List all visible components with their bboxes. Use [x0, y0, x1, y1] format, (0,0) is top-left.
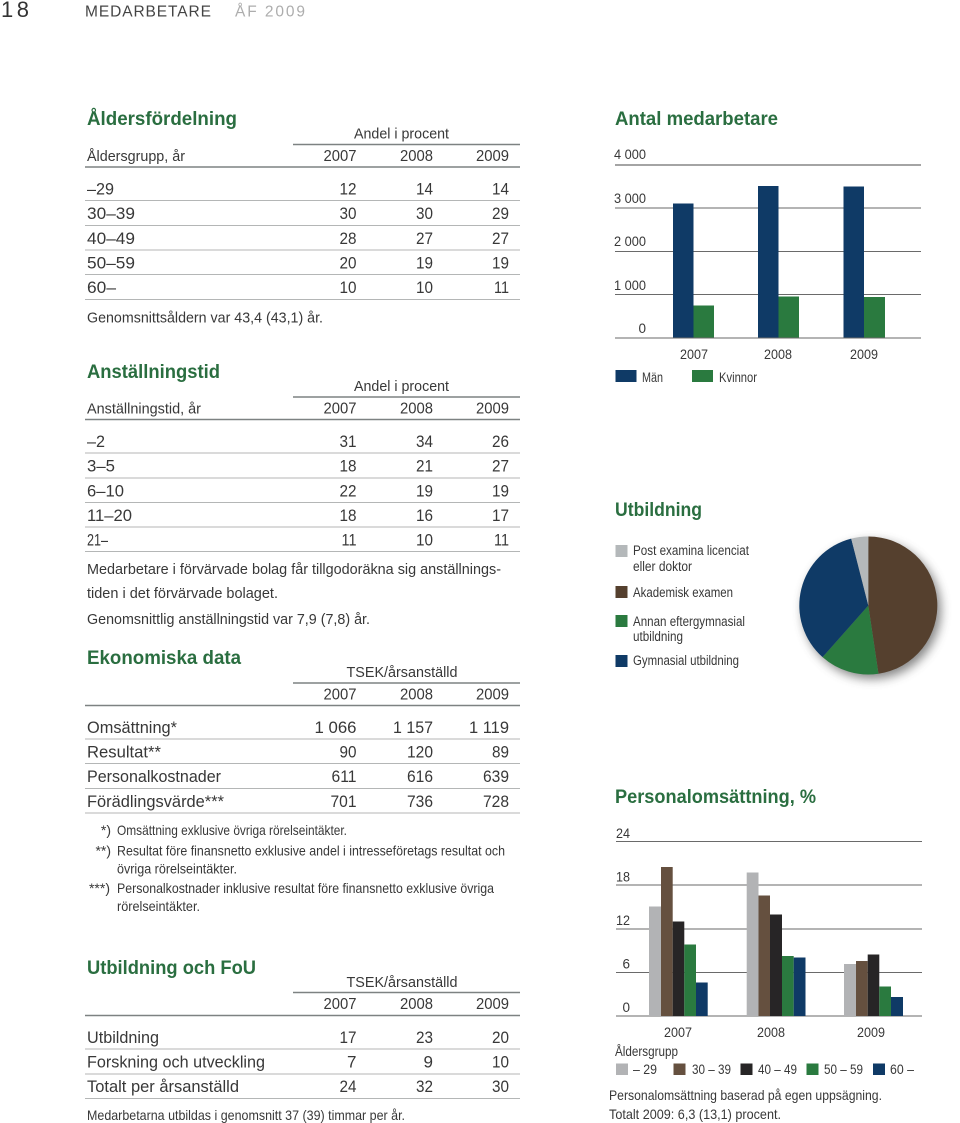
column header: 2007	[324, 686, 356, 704]
column header	[85, 378, 520, 420]
table rows: 120	[407, 742, 433, 762]
year labels: 2009	[850, 347, 878, 362]
table rows: 27	[492, 456, 509, 476]
notes: Genomsnittlig anställningstid var 7,9 (7,8) år.	[87, 611, 370, 628]
column header: 2007	[324, 996, 356, 1013]
table rows: 27	[416, 229, 433, 248]
table rows	[85, 1028, 520, 1098]
column header: 2008	[400, 996, 433, 1013]
table rows: 20	[340, 254, 356, 272]
heading: Utbildning och FoU	[87, 957, 256, 979]
table rows: –2	[87, 432, 105, 451]
table rows: –29	[87, 180, 114, 198]
table rows	[85, 718, 520, 813]
table rows: 1 119	[469, 718, 509, 737]
footnotes	[89, 822, 505, 914]
notes: Medarbetare i förvärvade bolag får tillgodoräkna sig anställnings-	[87, 561, 501, 578]
column header: 2009	[476, 148, 509, 165]
table rows: 21–	[87, 530, 108, 550]
legend: utbildning	[633, 629, 683, 644]
table rows: Personalkostnader	[87, 767, 221, 786]
table rows: 19	[416, 482, 433, 500]
table rows: 1 157	[393, 718, 433, 737]
heading: Åldersfördelning	[87, 106, 237, 130]
legend	[615, 1044, 914, 1077]
table rows: 19	[492, 482, 509, 500]
legend: – 29	[633, 1062, 657, 1077]
column header: Åldersgrupp, år	[87, 148, 185, 165]
table rows: 3–5	[87, 456, 115, 476]
table rows: 611	[332, 767, 356, 786]
grid and axis labels: 2 000	[614, 234, 646, 249]
legend	[616, 543, 749, 668]
column header: 2008	[400, 686, 433, 704]
table rows: 17	[492, 506, 509, 525]
column header: Andel i procent	[354, 378, 450, 395]
table rows: Förädlingsvärde***	[87, 792, 224, 811]
table rows: 29	[492, 204, 509, 223]
column header: 2009	[476, 996, 509, 1013]
legend: Akademisk examen	[633, 585, 733, 600]
legend: Män	[642, 370, 663, 385]
table rows: 89	[492, 742, 509, 762]
column header: 2007	[324, 148, 356, 165]
grid and axis labels: 1 000	[614, 278, 646, 293]
table rows: 28	[340, 229, 356, 248]
column header: TSEK/årsanställd	[346, 664, 458, 681]
chart: Personalomsättning	[609, 786, 922, 1122]
table rows: 31	[340, 432, 356, 451]
table rows: 11	[494, 278, 509, 297]
year labels: 2007	[680, 347, 708, 362]
table rows: 639	[483, 767, 509, 786]
table: Åldersfördelning	[85, 106, 520, 326]
footnotes: **)	[95, 842, 111, 858]
grid and axis labels	[614, 147, 921, 338]
column header: 2008	[400, 400, 433, 418]
table rows: 12	[340, 180, 356, 198]
table rows: 616	[407, 767, 433, 786]
table rows: 10	[340, 278, 356, 297]
table rows: 19	[492, 254, 509, 272]
legend: 40 – 49	[758, 1062, 797, 1077]
heading: Antal medarbetare	[615, 108, 778, 130]
table rows: 21	[416, 456, 433, 476]
legend: Post examina licenciat	[633, 543, 749, 558]
table rows	[85, 180, 520, 300]
legend: eller doktor	[633, 559, 692, 574]
footnotes: övriga rörelseintäkter.	[117, 860, 237, 876]
year labels	[664, 1025, 885, 1040]
column header: 2009	[476, 400, 509, 418]
table: Ekonomiska data	[85, 647, 520, 914]
legend: 60 –	[890, 1062, 914, 1077]
column header: 2007	[324, 400, 356, 418]
grid and axis labels: 0	[622, 1000, 630, 1015]
notes	[87, 561, 501, 628]
footnotes: Resultat före finansnetto exklusive andel i intresseföretags resultat och	[117, 842, 505, 858]
legend: Kvinnor	[719, 370, 757, 385]
table rows	[85, 432, 520, 552]
legend: Gymnasial utbildning	[633, 653, 739, 668]
year labels: 2008	[757, 1025, 785, 1040]
table rows: 24	[340, 1077, 356, 1096]
grid and axis labels: 0	[638, 321, 646, 336]
heading: Utbildning	[615, 499, 702, 521]
table rows: 6–10	[87, 482, 124, 500]
table rows: Resultat**	[87, 742, 161, 762]
table rows: 30–39	[87, 204, 135, 223]
table rows: Utbildning	[87, 1028, 159, 1047]
table: Anställningstid	[85, 361, 520, 628]
table rows: 27	[492, 229, 509, 248]
table rows: Omsättning*	[87, 718, 177, 737]
table rows: 40–49	[87, 229, 135, 248]
heading: Ekonomiska data	[87, 647, 241, 669]
table rows: 10	[416, 530, 433, 550]
table rows: Totalt per årsanställd	[87, 1077, 239, 1096]
footnotes: Personalkostnader inklusive resultat före finansnetto exklusive övriga	[117, 880, 494, 896]
table rows: 9	[424, 1052, 433, 1072]
footnotes: *)	[101, 822, 111, 838]
bars 2007	[649, 867, 708, 1016]
heading: Anställningstid	[87, 361, 220, 383]
legend: Åldersgrupp	[615, 1044, 678, 1059]
column header: Andel i procent	[354, 126, 450, 142]
grid and axis labels	[616, 826, 922, 1016]
table rows: 34	[416, 432, 433, 451]
year labels	[680, 347, 878, 362]
table rows: 10	[492, 1052, 509, 1072]
note: Totalt 2009: 6,3 (13,1) procent.	[609, 1106, 781, 1122]
table rows: 16	[416, 506, 433, 525]
year labels: 2009	[857, 1025, 885, 1040]
grid and axis labels: 6	[622, 956, 630, 972]
footnotes: ***)	[89, 880, 110, 896]
table rows: 14	[416, 180, 433, 198]
column header	[85, 126, 520, 167]
page header	[1, 0, 305, 22]
table rows: 7	[347, 1052, 356, 1072]
table rows: 1 066	[314, 718, 356, 737]
grid and axis labels: 4 000	[614, 147, 646, 162]
table rows: 11–20	[87, 506, 132, 525]
heading: Personalomsättning, %	[615, 786, 816, 808]
table rows: 90	[340, 742, 356, 762]
column header	[85, 664, 520, 706]
footnotes: rörelseintäkter.	[117, 898, 200, 914]
table: Utbildning och FoU	[85, 957, 520, 1123]
section name: MEDARBETARE	[85, 4, 211, 20]
column header	[85, 974, 520, 1016]
note	[609, 1087, 882, 1122]
chart: Utbildning	[615, 499, 941, 679]
table rows: 19	[416, 254, 433, 272]
table rows: 60–	[87, 278, 117, 297]
table rows: 11	[342, 530, 356, 550]
table rows: 30	[340, 204, 356, 223]
note: Genomsnittsåldern var 43,4 (43,1) år.	[87, 310, 323, 326]
table rows: 50–59	[87, 254, 135, 272]
bars 2009	[844, 954, 903, 1016]
chart: Antal medarbetare	[614, 108, 921, 385]
legend: 50 – 59	[824, 1062, 863, 1077]
table rows: 10	[416, 278, 433, 297]
bars	[673, 186, 885, 338]
grid and axis labels: 12	[616, 913, 630, 928]
table rows: 11	[494, 530, 509, 550]
bars 2008	[747, 872, 806, 1016]
table rows: 22	[340, 482, 356, 500]
table rows: 18	[340, 506, 356, 525]
column header: Anställningstid, år	[87, 400, 201, 418]
report name: ÅF 2009	[235, 4, 305, 20]
year labels: 2007	[664, 1025, 692, 1040]
grid and axis labels: 24	[616, 826, 630, 841]
table rows: 20	[492, 1028, 509, 1047]
table rows: 32	[416, 1077, 433, 1096]
table rows: 701	[330, 792, 356, 811]
column header: TSEK/årsanställd	[346, 974, 458, 991]
legend: 30 – 39	[692, 1062, 731, 1077]
table rows: 17	[340, 1028, 356, 1047]
table rows: 736	[407, 792, 433, 811]
table rows: 18	[340, 456, 356, 476]
column header: 2009	[476, 686, 509, 704]
grid and axis labels: 18	[616, 870, 630, 884]
table rows: 30	[492, 1077, 509, 1096]
table rows: 23	[416, 1028, 433, 1047]
table rows: 30	[416, 204, 433, 223]
table rows: 728	[483, 792, 509, 811]
table rows: 26	[492, 432, 509, 451]
footnotes: Omsättning exklusive övriga rörelseintäkter.	[117, 822, 347, 838]
grid and axis labels: 3 000	[614, 191, 646, 206]
column header: 2008	[400, 148, 433, 165]
note: Medarbetarna utbildas i genomsnitt 37 (39) timmar per år.	[87, 1107, 405, 1123]
pie chart	[799, 536, 941, 679]
table rows: Forskning och utveckling	[87, 1052, 265, 1072]
table rows: 14	[492, 180, 509, 198]
legend	[616, 370, 757, 385]
notes: tiden i det förvärvade bolaget.	[87, 585, 278, 602]
legend: Annan eftergymnasial	[633, 614, 745, 629]
note: Personalomsättning baserad på egen uppsägning.	[609, 1087, 882, 1103]
year labels: 2008	[764, 347, 792, 362]
